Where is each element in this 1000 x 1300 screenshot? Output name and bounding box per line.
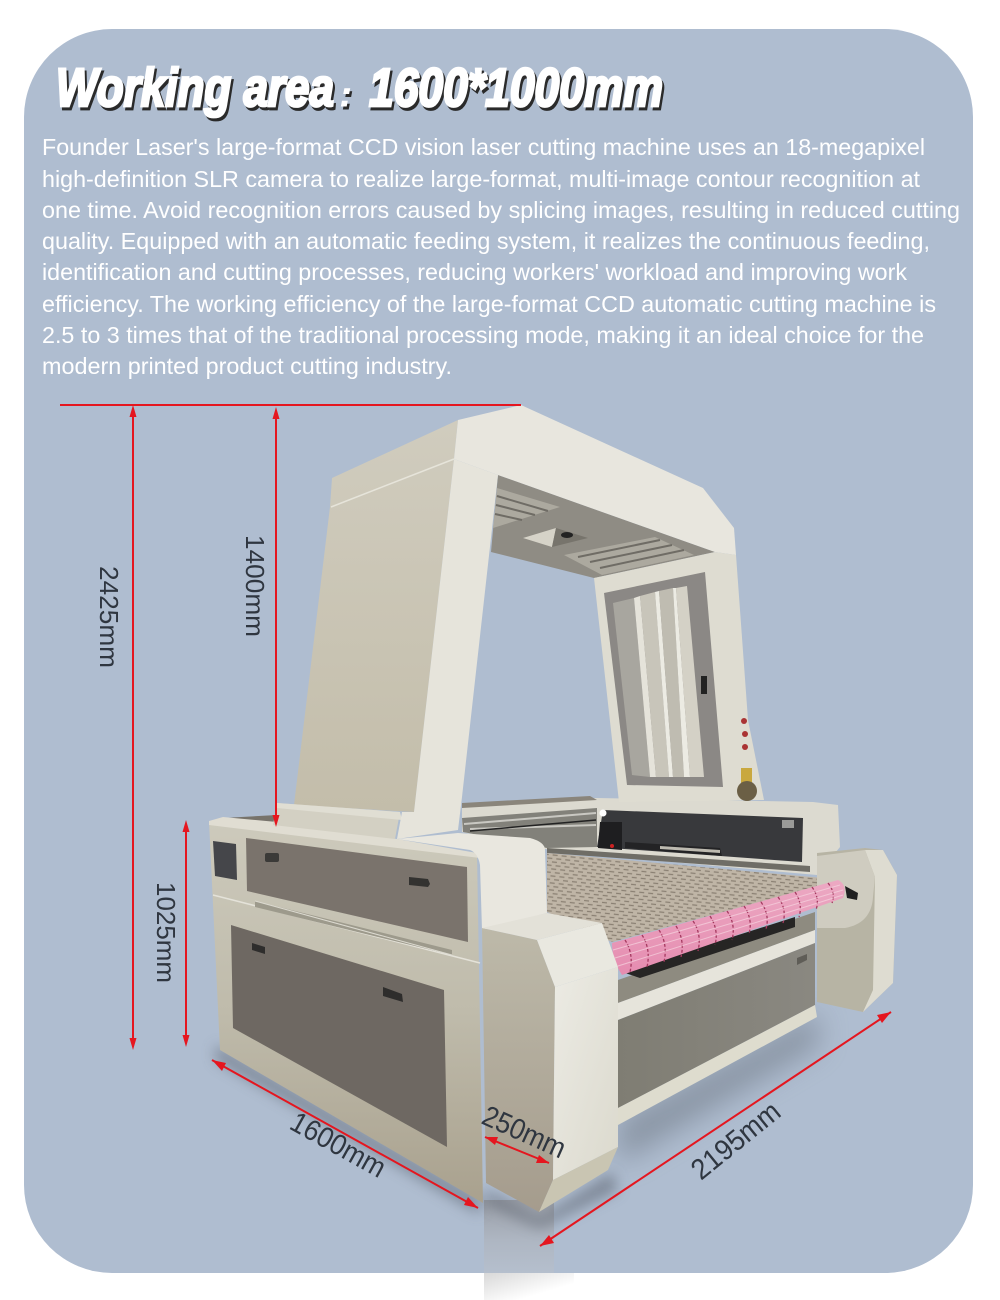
dimension lines [60, 405, 891, 1246]
title: : [340, 76, 351, 114]
left table body [209, 815, 483, 1203]
front corner column [482, 913, 618, 1212]
laser cutting machine illustration [209, 405, 897, 1212]
control buttons and emergency knob [737, 718, 757, 801]
description text block: identification and cutting processes, reducing workers' workload and improving work [42, 259, 907, 285]
title: 1600*1000mm [369, 58, 663, 118]
left column upper [397, 833, 547, 930]
description text block: 2.5 to 3 times that of the traditional processing mode, making it an ideal choice for the [42, 322, 924, 348]
right side unit [817, 848, 897, 1012]
arrow: 1025mm [182, 820, 190, 1047]
arrow: 1400mm [272, 407, 280, 827]
dark slot under roller [622, 917, 795, 978]
camera bay dark interior [547, 810, 810, 872]
conveyor mesh bed [547, 853, 840, 942]
title [56, 58, 663, 118]
label: 2195mm: 2195mm [685, 1095, 787, 1186]
gantry base foot [273, 803, 402, 839]
label: 1600mm: 1600mm [285, 1106, 391, 1185]
control window [213, 841, 237, 880]
title: Working area [56, 58, 334, 118]
description text block: one time. Avoid recognition errors caused by splicing images, resulting in reduced cutting [42, 197, 960, 223]
lower cabinet panel [231, 925, 447, 1147]
arrow: 250mm [485, 1137, 549, 1163]
arrow: 2195mm [540, 1012, 891, 1246]
label: 2425mm: 2425mm [94, 566, 124, 668]
description text block [42, 134, 960, 379]
gantry top surface [454, 405, 736, 555]
gantry front pillar [397, 459, 498, 839]
description text block: Founder Laser's large-format CCD vision laser cutting machine uses an 18-megapixel [42, 134, 925, 160]
description text block: modern printed product cutting industry. [42, 353, 452, 379]
floor reflections and shadow [216, 1012, 820, 1273]
gantry seam [331, 459, 454, 507]
description text block: efficiency. The working efficiency of the large-format CCD automatic cutting machine is [42, 291, 936, 317]
arrow: 1600mm [212, 1060, 478, 1208]
lower front conveyor frame [618, 912, 817, 1125]
gantry door with slats [604, 572, 723, 787]
arrow: 2425mm [130, 405, 136, 1050]
rear frame and rails [462, 796, 840, 875]
gantry right pillar [594, 552, 764, 802]
top reference line [60, 404, 521, 406]
description text block: high-definition SLR camera to realize large-format, multi-image contour recognition at [42, 166, 921, 192]
label: 1025mm: 1025mm [151, 882, 181, 983]
label: 250mm: 250mm [477, 1100, 571, 1165]
description text block: quality. Equipped with an automatic feeding system, it realizes the continuous feeding, [42, 228, 930, 254]
dimension labels [94, 535, 787, 1186]
gantry underside with vents [491, 475, 715, 578]
floor strip fading below the panel [484, 1273, 574, 1300]
label: 1400mm: 1400mm [240, 535, 270, 637]
gantry left side panel [294, 420, 458, 812]
pink roller [612, 880, 845, 975]
gantry frame [273, 405, 764, 839]
top drawer panel [246, 838, 468, 942]
